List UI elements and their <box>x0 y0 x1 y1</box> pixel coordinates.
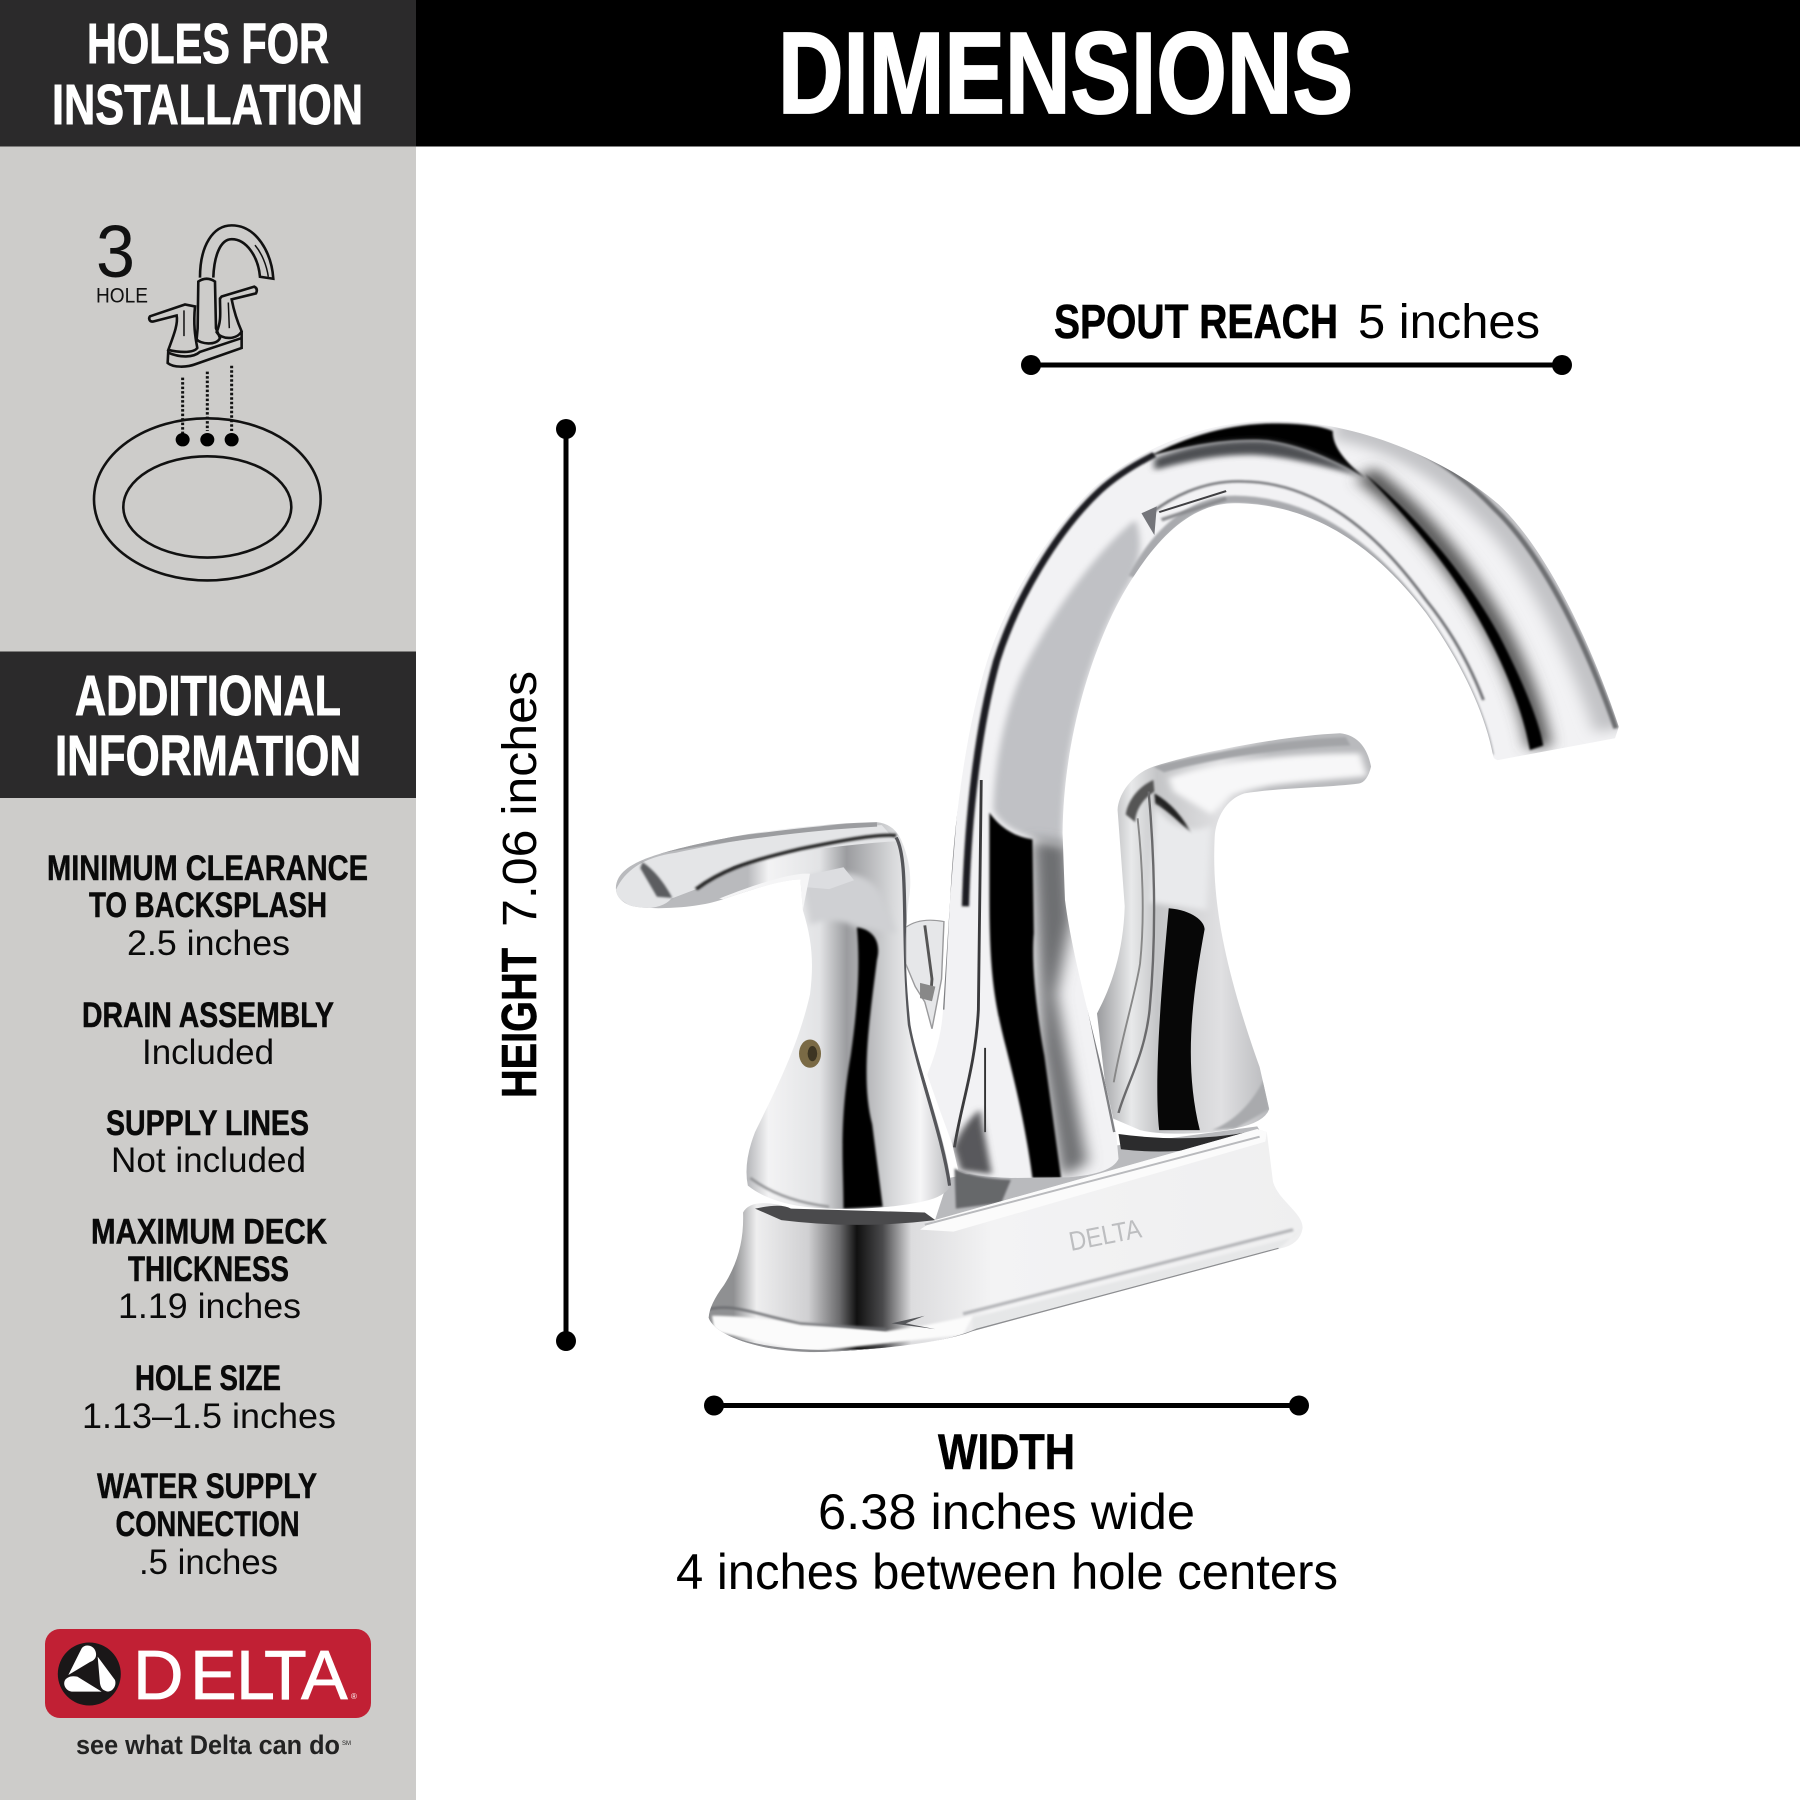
heading bar: holes for installation: HOLES FOR <box>87 12 329 76</box>
base logo text: DELTA <box>1066 1214 1144 1257</box>
dimension: height <box>493 419 576 1351</box>
heading bar: holes for installation: INSTALLATION <box>52 73 363 137</box>
spec: water supply connection: CONNECTION <box>116 1505 300 1544</box>
spec: maximum deck thickness: MAXIMUM DECK <box>91 1212 327 1252</box>
logo: delta: DELTA <box>133 1636 348 1714</box>
spec: minimum clearance <box>47 849 368 963</box>
heading bar: additional information <box>0 652 416 798</box>
heading bar: dimensions <box>416 0 1800 146</box>
dimension: spout reach: 5 inches <box>1358 296 1540 349</box>
spec: drain assembly: Included <box>142 1033 274 1072</box>
logo: delta: ® <box>351 1692 357 1701</box>
heading bar: additional information: ADDITIONAL <box>75 664 341 728</box>
spec: hole size: 1.13–1.5 inches <box>82 1397 336 1436</box>
spec: drain assembly: DRAIN ASSEMBLY <box>82 996 334 1035</box>
icon: three hole label: HOLE <box>96 284 148 308</box>
spout collar shadow <box>954 1168 1011 1209</box>
spec: drain assembly <box>82 996 334 1072</box>
spec: water supply connection: WATER SUPPLY <box>97 1467 317 1506</box>
faucet illustration <box>614 421 1619 1352</box>
dimension: spout reach: SPOUT REACH <box>1054 296 1338 349</box>
icon: three hole label <box>96 210 148 308</box>
dimension: width <box>676 1396 1338 1600</box>
spout <box>927 421 1619 1178</box>
dimension: width: WIDTH <box>938 1424 1075 1480</box>
heading bar: dimensions: DIMENSIONS <box>778 8 1353 138</box>
pop-up rod <box>906 920 944 1029</box>
dimension: height: 7.06 inches <box>494 671 547 927</box>
right handle <box>1097 733 1371 1134</box>
spec: water supply connection: .5 inches <box>139 1543 278 1582</box>
spec: minimum clearance: MINIMUM CLEARANCE <box>47 849 368 888</box>
spec: maximum deck thickness: THICKNESS <box>128 1250 289 1289</box>
handle set screw <box>799 1039 821 1068</box>
right handle gasket <box>1119 1131 1252 1151</box>
spec: hole size <box>82 1359 336 1436</box>
spec: supply lines: SUPPLY LINES <box>106 1104 309 1143</box>
spec: hole size: HOLE SIZE <box>135 1359 281 1398</box>
deck interior <box>934 1126 1260 1222</box>
spec: maximum deck thickness: 1.19 inches <box>118 1287 301 1326</box>
heading bar: additional information: INFORMATION <box>55 724 361 788</box>
spec: water supply connection <box>97 1467 317 1582</box>
left handle <box>614 822 951 1209</box>
dimension: height: HEIGHT <box>493 948 547 1098</box>
dimension: spout reach <box>1021 296 1572 375</box>
spec: supply lines: Not included <box>111 1141 306 1180</box>
icon: line drawing of faucet over sink with three holes <box>94 225 321 580</box>
spec: minimum clearance: TO BACKSPLASH <box>89 886 327 925</box>
text block: additional information list <box>47 849 368 1582</box>
base plate <box>705 1129 1303 1352</box>
spec: supply lines <box>106 1104 309 1180</box>
panel: sidebar background <box>0 0 416 1800</box>
logo: delta <box>45 1629 371 1718</box>
heading bar: holes for installation <box>0 0 416 146</box>
tagline: see what Delta can do <box>76 1730 340 1760</box>
tagline: SM <box>342 1741 351 1747</box>
dimension: width: 6.38 inches wide <box>818 1484 1195 1540</box>
left handle gasket <box>755 1206 935 1225</box>
spec: minimum clearance: 2.5 inches <box>127 924 290 963</box>
spec: maximum deck thickness <box>91 1212 327 1326</box>
icon: three hole label: 3 <box>96 210 135 293</box>
dimension: width: 4 inches between hole centers <box>676 1544 1338 1600</box>
